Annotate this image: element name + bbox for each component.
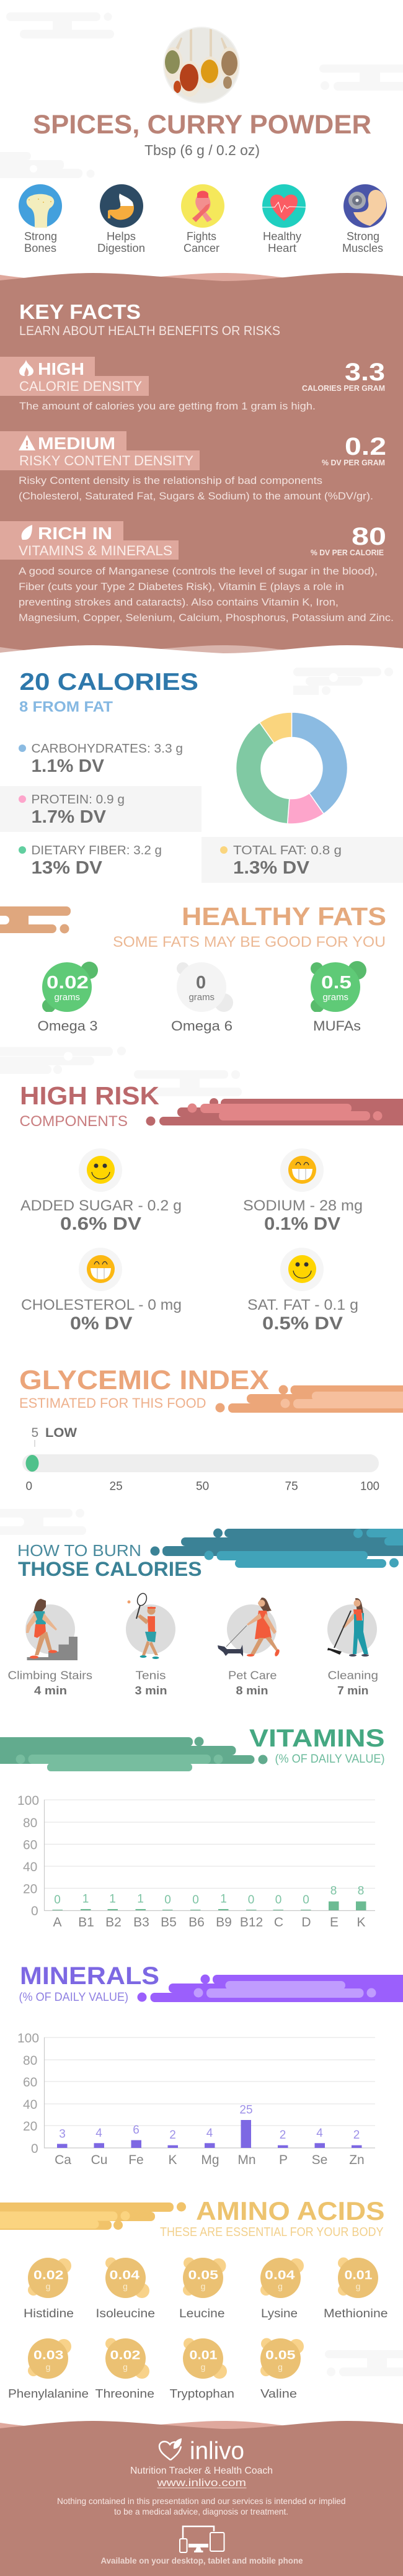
benefit: fights cancer: Fights [187,230,216,243]
heading: healthy fats: HEALTHY FATS [182,902,386,931]
risk: added sugar: 0.6% DV [60,1214,142,1234]
amino: leucine: 0.05 [188,2268,218,2282]
amino: valine [260,2338,304,2401]
bar chart: vitamins: D [301,1915,311,1930]
risk: cholesterol: 0% DV [70,1314,133,1334]
logo: inlivo: inlivo [190,2437,244,2464]
bar chart: vitamins: B5 [161,1915,177,1930]
benefit: helps digestion: Digestion [97,242,145,254]
fact: rich in vitamins and minerals: RICH IN [38,524,112,543]
legend: dietary fiber: DIETARY FIBER: 3.2 g [31,844,162,857]
activity: cleaning: Cleaning [327,1669,378,1681]
heading: glycemic index: GLYCEMIC INDEX [19,1365,269,1395]
bar chart: minerals: 60 [23,2075,37,2090]
chart: glycemic scale: 25 [109,1480,123,1493]
fact: risky content density: RISKY CONTENT DENSITY [19,453,193,468]
risk: saturated fat: 0.5% DV [262,1314,343,1334]
bar chart: vitamins: B3 [133,1915,149,1930]
fact: risky content density: % DV PER GRAM [322,458,385,467]
bar chart: minerals: Mn [237,2153,256,2167]
activity: tennis: 3 min [135,1684,167,1697]
risk: saturated fat: SAT. FAT - 0.1 g [247,1297,358,1313]
bar chart: vitamins: B1 [78,1915,94,1930]
chart: glycemic scale: 75 [285,1480,298,1493]
activity: pet care: Pet Care [228,1669,277,1681]
activity: climbing stairs [7,1599,92,1697]
footer url: www.inlivo.com [156,2477,246,2489]
bar chart: vitamins: 20 [23,1882,37,1896]
bar chart: minerals: 80 [23,2054,37,2068]
decorative cloud: amino right [325,2350,403,2376]
bar chart: vitamins: K [356,1915,366,1930]
bar chart: vitamins: B12 [240,1915,263,1930]
amino: histidine: g [46,2281,50,2291]
heading: calories: 20 CALORIES [20,669,198,695]
fact: risky content density: 0.2 [345,433,386,460]
footer availability note: Available on your desktop, tablet and mobile phone [100,2556,303,2565]
decorative cloud: calories right [293,668,393,695]
fact: calorie density: 3.3 [345,359,385,386]
risk: cholesterol: CHOLESTEROL - 0 mg [21,1297,182,1313]
amino: tryptophan [170,2338,234,2401]
fact: rich in vitamins and minerals: Magnesium, Copper, Selenium, Calcium, Phosphorus, Potassium and Zinc. [19,612,394,624]
amino: leucine: Leucine [179,2307,224,2320]
fact: calorie density: CALORIES PER GRAM [302,383,385,393]
banner: vitamins [0,1737,268,1771]
bar chart: minerals: 20 [23,2119,37,2134]
chart: glycemic scale: 0 [26,1480,32,1493]
benefit: strong muscles: Muscles [342,242,383,254]
stat: MUFAs [311,961,366,1034]
footer tagline: Nutrition Tracker & Health Coach [130,2466,273,2476]
footer disclaimer [57,2496,346,2516]
bar chart: minerals [17,2031,375,2167]
legend: dietary fiber [19,844,162,878]
amino: isoleucine: Isoleucine [95,2307,155,2320]
chart: glycemic scale: 50 [196,1480,209,1493]
legend: carbohydrates: 1.1% DV [31,756,105,776]
subheading: amino acids: THESE ARE ESSENTIAL FOR YOUR BODY [160,2225,383,2239]
benefit: healthy heart: Heart [268,242,296,254]
amino: valine: g [278,2362,283,2372]
amino: leucine: g [201,2281,205,2291]
bar chart: minerals: 40 [23,2098,37,2112]
activity: cleaning [327,1598,378,1697]
amino: methionine: 0.01 [345,2268,372,2282]
legend: carbohydrates [19,742,183,776]
fact: risky content density: Risky Content density is the relationship of bad components [19,475,322,486]
decorative cloud: burn left [0,1509,86,1535]
bar chart: minerals: Zn [349,2153,365,2167]
bar chart: vitamins: 0 [192,1894,199,1907]
key facts heading: KEY FACTS [19,300,141,323]
fact: risky content density [0,431,386,502]
stat: MUFAs: 0.5 [321,973,352,993]
benefit: strong muscles: Strong [347,230,379,243]
activity: pet care [218,1598,280,1697]
subheading: healthy fats: SOME FATS MAY BE GOOD FOR YOU [113,934,386,950]
bar chart: minerals: 4 [316,2127,323,2140]
fact: rich in vitamins and minerals: VITAMINS & MINERALS [19,543,172,558]
heading: vitamins: VITAMINS [249,1725,384,1752]
amino: lysine: 0.04 [265,2268,296,2282]
bar chart: minerals: Fe [128,2153,144,2167]
bar chart: vitamins: 0 [54,1894,61,1907]
stat: MUFAs: grams [322,992,348,1003]
bar chart: vitamins: 0 [248,1894,254,1907]
banner: amino acids [0,2203,186,2230]
banner: glycemic index [216,1385,403,1413]
stat: omega 6: 0 [196,973,206,993]
bar chart: vitamins: E [330,1915,339,1930]
decorative cloud: header right [319,65,403,91]
bar chart: vitamins: 1 [220,1892,227,1906]
benefit: fights cancer [181,184,224,254]
bar chart: minerals: 2 [280,2129,286,2142]
amino: threonine: 0.02 [110,2349,140,2363]
risk: sodium: SODIUM - 28 mg [243,1197,363,1214]
bar chart: vitamins: 40 [23,1860,37,1874]
bar chart: vitamins: 8 [358,1885,364,1897]
activity: tennis: Tenis [135,1669,166,1681]
amino: isoleucine: 0.04 [109,2268,140,2282]
stat: omega 6: grams [188,992,215,1003]
amino: isoleucine: g [123,2281,128,2291]
fact: rich in vitamins and minerals [0,521,394,624]
risk: cholesterol [21,1248,182,1334]
panel: footer background [0,2421,403,2576]
legend: protein [0,786,202,832]
footer disclaimer: to be a medical advice, diagnosis or treatment. [114,2507,288,2516]
bar chart: minerals: 2 [169,2129,176,2142]
bar chart: vitamins: B2 [105,1915,122,1930]
subheading: from fat: 8 FROM FAT [19,699,113,715]
banner: how to burn [150,1529,403,1568]
bar chart: minerals: K [168,2153,177,2167]
legend: carbohydrates: CARBOHYDRATES: 3.3 g [31,742,183,756]
bar chart: minerals: P [279,2153,288,2167]
bar chart: minerals: Mg [201,2153,219,2167]
fact: risky content density: MEDIUM [38,434,115,453]
fact: rich in vitamins and minerals: % DV PER CALORIE [311,548,384,557]
activity: cleaning: 7 min [337,1684,368,1697]
fact: calorie density: The amount of calories you are getting from 1 gram is high. [19,400,316,412]
title: SPICES, CURRY POWDER [33,110,371,140]
decorative cloud: mid left [0,1047,126,1074]
fact: rich in vitamins and minerals: 80 [352,523,386,550]
amino: tryptophan: Tryptophan [170,2387,234,2401]
decorative cloud: header lower left [0,152,94,178]
stat: omega 3: 0.02 [46,973,89,993]
amino: lysine [260,2258,304,2320]
bar chart: vitamins: B6 [188,1915,205,1930]
legend: dietary fiber: 13% DV [31,858,103,878]
amino: methionine: g [356,2281,360,2291]
bar chart: minerals: 4 [95,2127,102,2140]
benefit: fights cancer: Cancer [184,242,219,254]
subheading: vitamins: (% OF DAILY VALUE) [275,1753,384,1766]
bar chart: minerals: 2 [353,2129,360,2142]
bar chart: vitamins: C [274,1915,283,1930]
bar chart: minerals: Se [312,2153,327,2167]
bar chart: minerals: Ca [55,2153,71,2167]
legend: total fat: 1.3% DV [233,858,310,878]
bar chart: vitamins: 0 [303,1894,309,1907]
bar chart: minerals: 4 [206,2127,213,2140]
amino: phenylalanine [8,2338,89,2401]
fact: calorie density: CALORIE DENSITY [19,378,142,394]
bar chart: vitamins: B9 [216,1915,232,1930]
amino: lysine: Lysine [261,2307,298,2320]
benefit: helps digestion [97,184,145,254]
stat: omega 3: grams [55,992,80,1003]
amino: leucine [179,2257,226,2320]
panel: key facts background [0,273,403,667]
amino: lysine: g [278,2281,283,2291]
bar chart: vitamins: A [53,1915,62,1930]
amino: threonine [95,2338,154,2401]
risk: added sugar [20,1148,182,1234]
benefit: helps digestion: Helps [107,230,136,243]
food photo: spices on spoons [161,25,242,105]
donut chart: macronutrients [236,712,347,824]
bar chart: vitamins: 1 [82,1892,89,1906]
bar chart: vitamins: 0 [164,1894,171,1907]
amino: threonine: g [123,2362,128,2372]
amino: methionine [324,2257,388,2320]
heading: minerals: MINERALS [20,1962,159,1990]
amino: valine: 0.05 [265,2349,295,2363]
bar chart: vitamins [17,1794,375,1930]
bar chart: vitamins: 1 [137,1892,144,1906]
bar chart: minerals: 100 [17,2031,39,2046]
fact: calorie density [0,357,385,412]
benefit: healthy heart [262,184,306,254]
icon: flame [19,360,33,376]
benefit: strong bones: Bones [24,242,56,254]
amino: tryptophan: g [201,2362,205,2372]
bar chart: vitamins: 80 [23,1816,37,1830]
amino: histidine [24,2258,74,2320]
heading: high risk: HIGH RISK [20,1081,159,1110]
bar chart: minerals: 0 [31,2142,38,2156]
amino: valine: Valine [260,2387,297,2401]
legend: protein: 1.7% DV [31,807,107,827]
bar chart: minerals: Cu [91,2153,107,2167]
amino: methionine: Methionine [324,2307,388,2320]
banner: high risk [146,1098,403,1125]
banner: healthy fats [0,906,71,933]
stat: omega 6: Omega 6 [171,1018,232,1034]
amino: phenylalanine: g [46,2362,50,2372]
bar chart: minerals: 25 [239,2103,253,2117]
bar chart: vitamins: 1 [109,1892,116,1906]
key facts subheading: LEARN ABOUT HEALTH BENEFITS OR RISKS [19,324,280,338]
chart: glycemic scale: 5 [31,1426,38,1440]
banner: minerals [138,1974,403,2002]
fact: risky content density: (Cholesterol, Saturated Fat, Sugars & Sodium) to the amount (%DV/gr). [19,490,373,502]
stat: MUFAs: MUFAs [313,1018,361,1034]
decorative cloud: high risk [134,1070,242,1096]
footer disclaimer: Nothing contained in this presentation and our services is intended or implied [57,2496,346,2506]
legend: total fat [202,837,403,883]
stat: omega 3 [37,962,98,1034]
subheading: components: COMPONENTS [20,1113,128,1130]
benefit: healthy heart: Healthy [263,230,301,243]
amino: histidine: Histidine [24,2307,74,2320]
activity: climbing stairs: 4 min [34,1684,67,1697]
fact: rich in vitamins and minerals: A good source of Manganese (controls the level of sugar in the blood), [19,565,378,577]
activity: climbing stairs: Climbing Stairs [7,1669,92,1681]
bar chart: vitamins: 100 [17,1794,39,1808]
bar chart: minerals: 6 [133,2124,140,2137]
amino: isoleucine [95,2257,155,2320]
risk: added sugar: ADDED SUGAR - 0.2 g [20,1197,182,1214]
fact: rich in vitamins and minerals: Fiber (cuts your Type 2 Diabetes Risk), Vitamin E (plays a role in [19,581,344,593]
fact: calorie density: HIGH [38,359,84,378]
icon: warning triangle [19,435,35,450]
bar chart: vitamins: 0 [275,1894,281,1907]
chart: glycemic scale: 100 [360,1480,379,1493]
stat: omega 6 [171,962,233,1034]
bar chart: minerals: 3 [59,2128,66,2140]
bar chart: vitamins: 8 [330,1885,337,1897]
serving size: Tbsp (6 g / 0.2 oz) [144,142,260,158]
subheading: minerals: (% OF DAILY VALUE) [19,1991,128,2004]
icon: devices [180,2526,224,2552]
amino: tryptophan: 0.01 [190,2349,217,2363]
bar chart: vitamins: 0 [31,1904,38,1918]
subheading: glycemic index: ESTIMATED FOR THIS FOOD [19,1395,206,1411]
amino: threonine: Threonine [95,2387,154,2401]
amino: phenylalanine: Phenylalanine [8,2387,89,2401]
legend: protein: PROTEIN: 0.9 g [31,793,125,807]
benefit: strong bones: Strong [24,230,57,243]
benefit: strong bones [19,184,62,254]
legend: total fat: TOTAL FAT: 0.8 g [233,844,342,857]
activity: pet care: 8 min [236,1684,268,1697]
stat: omega 3: Omega 3 [37,1018,98,1034]
risk: sodium [243,1148,363,1234]
decorative cloud: header left [6,12,114,38]
logo: inlivo [159,2437,244,2464]
heading: how to burn: HOW TO BURN [17,1541,141,1560]
icon: leaf [22,525,32,540]
heading: those calories: THOSE CALORIES [18,1558,202,1580]
benefit: strong muscles [342,184,387,254]
amino: phenylalanine: 0.03 [33,2349,63,2363]
amino: histidine: 0.02 [33,2268,63,2282]
heading: amino acids: AMINO ACIDS [196,2196,384,2225]
risk: sodium: 0.1% DV [264,1214,341,1234]
fact: rich in vitamins and minerals: preventing strokes and cataracts). Also contains Vitamin K, Iron, [19,596,339,608]
chart: glycemic scale: LOW [45,1426,77,1440]
risk: saturated fat [247,1248,358,1334]
bar chart: vitamins: 60 [23,1838,37,1853]
chart: glycemic scale [22,1426,379,1493]
activity: tennis [126,1592,175,1697]
